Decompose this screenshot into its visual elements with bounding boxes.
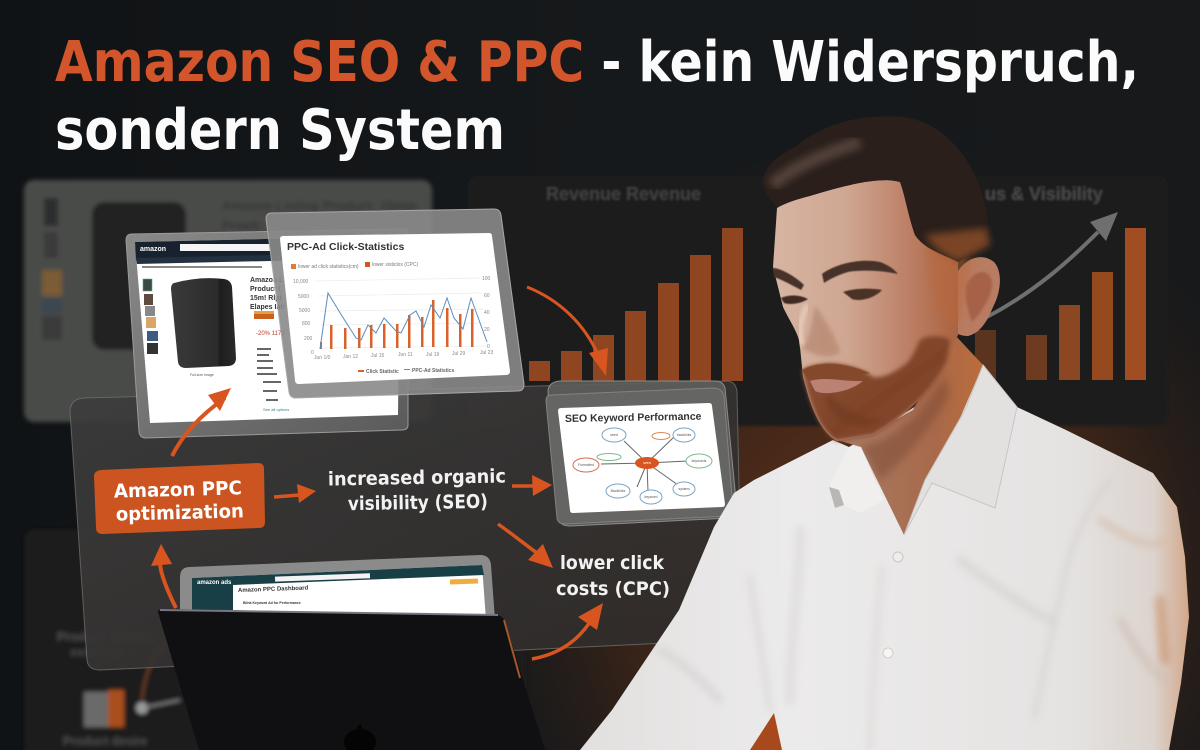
chart bars	[320, 300, 474, 349]
eye left	[781, 295, 808, 304]
chart axis labels: 60	[484, 293, 490, 299]
title: Amazon SEO & PPC - kein Widerspruch,	[55, 30, 1139, 95]
hair warm fade	[925, 228, 990, 262]
chart axis labels: 5000	[299, 308, 310, 314]
chart axis labels: 20	[484, 327, 490, 333]
text: lower click costs	[556, 552, 670, 600]
hair highlight	[772, 142, 860, 185]
amazon product page card: amazon	[140, 246, 166, 253]
moustache	[802, 364, 870, 379]
chart axis labels: 5000	[298, 294, 309, 300]
beard	[802, 336, 950, 441]
chart axis labels	[293, 276, 494, 361]
ppc click statistics card: PPC-Ad Statistics	[412, 368, 454, 374]
blurred background panel: revenue chart: Revenue Revenue	[546, 184, 701, 204]
text: increased organic visibility: increased organic	[328, 465, 506, 491]
nose shadow	[802, 305, 840, 356]
shirt body	[580, 365, 1189, 750]
arrow: laptop to lower cpc	[532, 603, 603, 659]
eyebrow right	[822, 261, 898, 283]
blurred background panel: revenue chart	[468, 176, 1168, 426]
hair	[763, 116, 990, 262]
chart axis labels: 200	[304, 336, 313, 342]
text: lower click costs: lower click	[560, 552, 664, 574]
chart line	[320, 293, 487, 349]
laptop: Blink Keyword Ad for Performance	[243, 601, 301, 605]
arrow: ppc chart to seo card	[527, 287, 608, 376]
arrow: visibility to lower cpc	[498, 524, 553, 568]
arrow: dashboard to ppc	[151, 544, 176, 608]
gap between arm and body	[750, 713, 782, 750]
eye right	[843, 289, 882, 300]
seo keyword card: keywords	[692, 459, 707, 463]
trend arrow	[985, 232, 1098, 318]
orange temple light	[925, 245, 972, 330]
eyebrow left	[773, 268, 804, 290]
chart axis labels: Jul 19	[426, 352, 440, 358]
chart axis labels: 0	[487, 344, 490, 350]
blurred lower-left panel items: Product xxxxxx	[57, 629, 154, 644]
amazon product page card: Full-size Image	[190, 373, 214, 377]
laptop	[158, 555, 545, 750]
amazon product page card: Amazon L	[250, 277, 284, 284]
blurred background panel: product listing	[24, 180, 432, 422]
laptop lid	[158, 609, 545, 750]
seo keyword card	[546, 381, 737, 526]
apple logo	[344, 729, 376, 750]
amazon product page card	[126, 229, 408, 438]
chart axis labels: 0	[311, 350, 314, 356]
text: increased organic visibility	[328, 465, 506, 515]
blurred lower-left panel items: xxxxxxxx	[70, 645, 124, 659]
blurred background panel: revenue chart: us & Visibility	[985, 184, 1103, 204]
buttons	[893, 552, 903, 562]
ppc click statistics card: PPC-Ad Click-Statistics	[287, 241, 404, 253]
laptop: amazon ads	[197, 580, 232, 586]
ppc optimization button: optimization	[116, 500, 244, 526]
ppc click statistics card: Click Statistic	[366, 369, 399, 375]
seo keyword card: seed	[610, 433, 618, 437]
seo keyword card: system	[678, 487, 690, 491]
shirt folds	[660, 480, 1165, 750]
amazon product page card: Elapes Ialr	[250, 304, 285, 311]
chart axis labels: Jun 1/0	[314, 355, 331, 361]
seo keyword card: keyword	[644, 495, 658, 499]
chart axis labels: Jul 23	[480, 350, 494, 356]
title	[55, 30, 1139, 163]
seo keyword card: seed	[643, 461, 651, 465]
ppc click statistics card: lower sisticlos (CPC)	[372, 262, 418, 268]
blurred lower-left panel items	[25, 530, 525, 750]
chart axis labels: Jan 12	[343, 354, 358, 360]
nose highlight	[800, 305, 807, 345]
laptop screen back glass	[180, 555, 495, 620]
chart axis labels: 10,000	[293, 279, 309, 285]
chart axis labels: 100	[482, 276, 491, 282]
seo keyword card: Formatted	[578, 463, 594, 467]
glass panel: system flow	[70, 381, 742, 670]
amazon product page card: Product I	[250, 286, 280, 293]
ear	[953, 257, 1000, 336]
seo keyword card: backlinks	[677, 433, 691, 437]
laptop: Amazon PPC Dashboard	[238, 586, 309, 594]
dashboard screen	[192, 565, 486, 620]
face	[773, 180, 958, 441]
collar left	[829, 447, 884, 513]
ppc optimization button	[94, 463, 265, 534]
seo keyword card: SEO Keyword Performance	[565, 411, 702, 425]
keyword mind map	[601, 437, 688, 492]
ppc click statistics card: lower ad click statistics(cm)	[298, 264, 359, 270]
collar right	[904, 365, 1017, 535]
text: increased organic visibility: visibility (SEO)	[348, 491, 488, 515]
ppc optimization button: Amazon PPC	[114, 477, 242, 503]
chart axis labels: 40	[484, 310, 490, 316]
mouth	[810, 379, 863, 393]
product device	[171, 278, 236, 368]
blurred background panel: product listing: Proelt:	[222, 218, 263, 233]
person	[580, 116, 1189, 750]
text: lower click costs: costs (CPC)	[556, 578, 670, 600]
chart axis labels: Jun 11	[398, 352, 413, 358]
chin shadow	[825, 395, 885, 426]
arrow: visibility to seo card	[512, 475, 552, 496]
amazon product page card: See all options	[263, 407, 289, 412]
blurred lower-left panel items: Product desire	[63, 734, 147, 748]
blurred background panel: product listing: Amazon Listing Product: 15mm	[222, 198, 417, 213]
amazon product page card: 15m! Rlpt	[250, 295, 283, 302]
chart legend	[358, 370, 364, 372]
chart axis labels: Jul 29	[452, 351, 466, 357]
neck shadow under jaw	[861, 375, 950, 480]
arrow: ppc to product page	[172, 388, 231, 456]
neck	[837, 333, 983, 535]
chart gridlines	[316, 278, 488, 348]
arrow: ppc to organic visibility	[274, 484, 316, 503]
chart axis labels: 800	[302, 321, 311, 327]
bars right	[975, 228, 1146, 380]
amazon product page card: -20% 1173	[256, 331, 285, 337]
title: sondern System	[55, 98, 505, 163]
ppc click statistics card	[266, 209, 524, 398]
chart axis labels: Jul 15	[371, 353, 385, 359]
seo keyword card: Backlinks	[611, 489, 626, 493]
bars left	[529, 228, 743, 381]
